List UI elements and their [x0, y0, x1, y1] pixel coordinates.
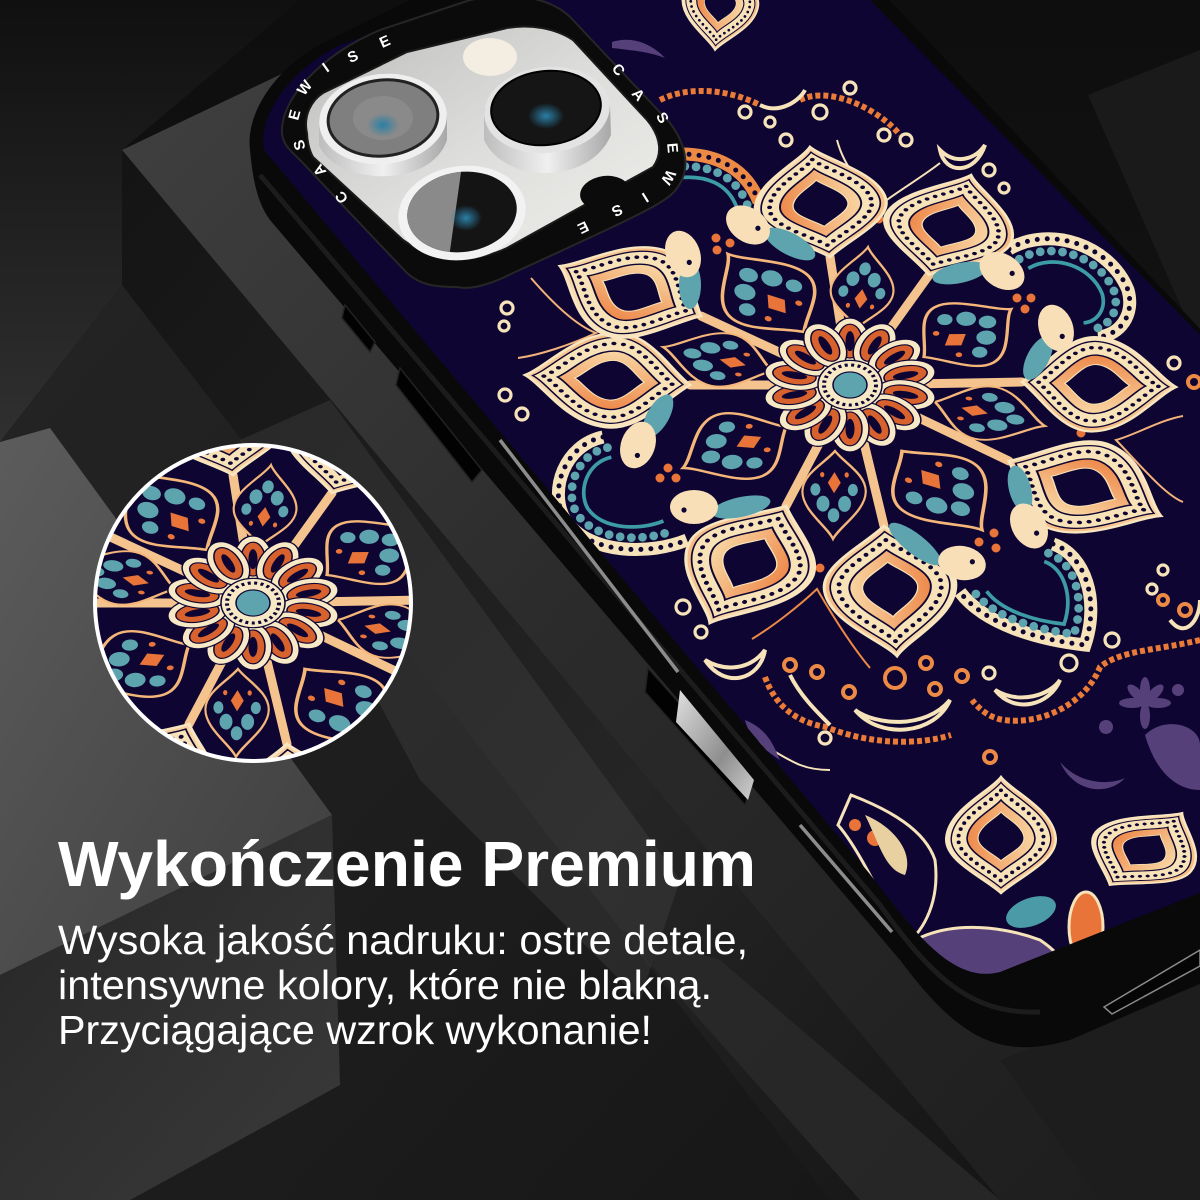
- CASEWISE ring lettering: S: [290, 138, 310, 152]
- CASEWISE ring lettering: E: [575, 217, 591, 237]
- bird heads and teal drops: [614, 197, 1080, 584]
- CASEWISE ring lettering: [285, 32, 681, 237]
- CASEWISE ring lettering: S: [609, 200, 625, 220]
- lens: upper right: [480, 61, 614, 173]
- glossy rim highlight: [500, 440, 892, 932]
- body text: Wysoka jakość nadruku: ostre detale,: [58, 917, 748, 963]
- orange dot clusters: [618, 214, 1086, 572]
- CASEWISE ring lettering: A: [310, 161, 330, 179]
- circular detail magnifier: [93, 443, 413, 763]
- CASEWISE ring lettering: I: [639, 189, 651, 205]
- body text: Przyciągające wzrok wykonanie!: [58, 1007, 652, 1053]
- top partial petal: [682, 0, 760, 52]
- CASEWISE ring lettering: I: [319, 60, 333, 76]
- body text: intensywne kolory, które nie blakną.: [58, 962, 712, 1008]
- CASEWISE ring lettering: E: [377, 32, 393, 52]
- title: Wykończenie Premium: [58, 828, 756, 900]
- camera module: [282, 0, 685, 288]
- CASEWISE ring lettering: C: [332, 187, 352, 207]
- cream ornaments: [518, 90, 1200, 770]
- flash: [463, 38, 517, 76]
- side buttons: [342, 305, 752, 805]
- body text: [58, 917, 748, 1053]
- lower partial mandala: [836, 775, 1198, 974]
- microphone hole: [578, 173, 632, 213]
- purple paisleys: [612, 40, 1200, 790]
- silver button highlight: [676, 690, 754, 800]
- lens: bottom: [398, 166, 526, 260]
- CASEWISE ring lettering: S: [652, 109, 672, 127]
- CASEWISE ring lettering: C: [608, 60, 628, 80]
- CASEWISE ring lettering: S: [345, 47, 361, 67]
- charging port: [1104, 950, 1200, 1014]
- orange rings: [784, 376, 1200, 763]
- CASEWISE ring lettering: A: [628, 85, 648, 105]
- orange scalloped arcs: [660, 91, 1200, 742]
- printed mandala artwork: [240, 0, 1200, 1000]
- CASEWISE ring lettering: E: [285, 108, 305, 122]
- lens: upper left: [315, 68, 451, 176]
- decorative rings: [499, 82, 1180, 744]
- phone case body: [250, 0, 1200, 1047]
- CASEWISE ring lettering: W: [294, 77, 317, 99]
- CASEWISE ring lettering: E: [663, 142, 681, 154]
- CASEWISE ring lettering: W: [657, 167, 679, 188]
- camera glass plate: [306, 26, 659, 259]
- dotted teal arcs: [558, 154, 1130, 645]
